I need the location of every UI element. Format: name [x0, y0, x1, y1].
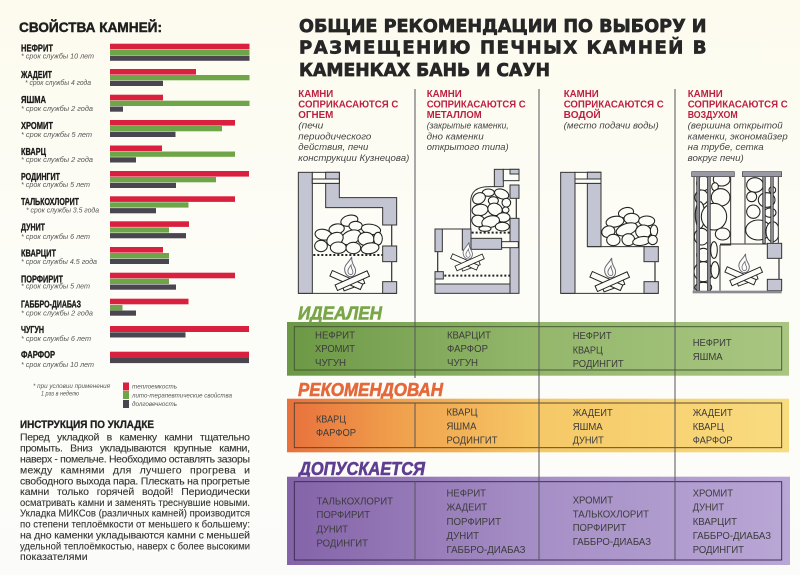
band: ideal: ЧУГУН	[447, 358, 478, 369]
band: ideal: ХРОМИТ	[315, 344, 355, 355]
band: recommended: РОДИНГИТ	[446, 435, 498, 446]
band: allowed: КВАРЦИТ	[693, 517, 737, 528]
band: recommended: КВАРЦ	[316, 415, 347, 426]
row: dunite: * срок службы 6 лет	[21, 232, 90, 241]
instructions text: свободного выхода пара. Плескать на прогретые	[20, 475, 250, 487]
column header: water: ВОДОЙ	[564, 108, 601, 121]
row: talc chlorite: * срок службы 3.5 года	[26, 206, 99, 214]
legend	[123, 382, 232, 408]
column header: fire: КАМНИ	[298, 89, 333, 100]
footnote	[33, 383, 110, 398]
row: quartz	[21, 146, 235, 164]
band: ideal: НЕФРИТ	[573, 331, 612, 342]
row: nephrite: НЕФРИТ	[21, 44, 53, 55]
row: quartz: * срок службы 2 года	[21, 155, 93, 164]
row: porcelain: ФАРФОР	[21, 350, 55, 361]
row: nephrite: * срок службы 10 лет	[21, 52, 94, 60]
instructions text: по степени теплоёмкости от меньшего к большему:	[20, 518, 250, 530]
band: ideal: ИДЕАЛЕН	[298, 303, 383, 323]
row: chromite	[21, 120, 235, 139]
band: recommended: ЖАДЕИТ	[693, 408, 733, 419]
column header: water: (место подачи воды)	[564, 120, 659, 132]
footnote: 1 раз в неделю	[41, 390, 79, 398]
column header: metal: СОПРИКАСАЮТСЯ С	[427, 100, 526, 110]
column header: metal: (закрытые каменки,	[427, 120, 509, 132]
band: ideal: ЧУГУН	[315, 358, 346, 369]
column header: air: каменки, экономайзер	[688, 132, 788, 142]
row: rodingite: РОДИНГИТ	[21, 172, 60, 183]
legend: теплоемкость	[132, 384, 178, 390]
band: recommended: ФАРФОР	[693, 436, 733, 446]
band: allowed	[287, 459, 790, 565]
band: ideal: ФАРФОР	[447, 344, 488, 355]
instructions text: наверх - помельче. Необходимо оставлять зазоры	[20, 454, 250, 466]
band: recommended: ЯШМА	[446, 422, 477, 433]
band: ideal: КВАРЦ	[573, 346, 603, 356]
legend: лито-терапевтические свойства	[131, 392, 232, 400]
row: quartzite	[21, 247, 169, 266]
heading: laying instructions: ИНСТРУКЦИЯ ПО УКЛАДКЕ	[20, 419, 154, 431]
diagram: stove with stones in contact with water	[561, 172, 658, 293]
instructions text: Перед укладкой в каменку камни тщательно	[20, 432, 250, 444]
row: porphyrite: * срок службы 5 лет	[21, 282, 90, 290]
row: dunite	[21, 221, 189, 241]
band: allowed: ГАББРО-ДИАБАЗ	[446, 545, 526, 556]
instructions text: на дно каменки укладываются камни с меньшей	[20, 529, 250, 541]
row: jadeite	[20, 69, 250, 87]
instructions text	[20, 432, 250, 563]
band: allowed: ГАББРО-ДИАБАЗ	[693, 531, 771, 542]
band: allowed: ПОРФИРИТ	[316, 510, 370, 521]
band: ideal: РОДИНГИТ	[573, 359, 624, 370]
band: ideal	[287, 303, 789, 376]
column header: metal	[427, 89, 526, 153]
band: allowed: ДУНИТ	[693, 503, 724, 514]
band: allowed: РОДИНГИТ	[693, 545, 744, 556]
row: rodingite	[21, 171, 249, 189]
row: porphyrite: ПОРФИРИТ	[21, 275, 63, 286]
row: cast iron: ЧУГУН	[21, 325, 44, 336]
instructions text: Укладка МИКСов (различных камней) производится	[20, 508, 250, 520]
diagram: stove with stones in contact with metal	[435, 169, 519, 293]
band: allowed: ПОРФИРИТ	[573, 523, 626, 534]
row: cast iron: * срок службы 6 лет	[21, 334, 91, 343]
band: allowed: РОДИНГИТ	[316, 539, 368, 550]
row: chromite: * срок службы 5 лет	[21, 130, 92, 139]
instructions text: осматривать камни и заменять треснувшие новыми.	[20, 497, 250, 509]
band: recommended: ЯШМА	[573, 422, 603, 433]
column header: fire: конструкции Кузнецова)	[298, 153, 409, 164]
footnote: * при условии применения	[33, 383, 110, 390]
instructions text: промыть. Вниз укладываются крупные камни,	[20, 442, 250, 454]
main title: РАЗМЕЩЕНИЮ ПЕЧНЫХ КАМНЕЙ В	[299, 36, 706, 58]
legend: долговечность	[132, 400, 178, 408]
band: recommended: ЖАДЕИТ	[573, 408, 613, 419]
band: allowed: ПОРФИРИТ	[446, 517, 501, 528]
column header: metal: КАМНИ	[427, 89, 462, 100]
band: allowed: ДОПУСКАЕТСЯ	[297, 459, 426, 479]
instructions text: между камнями для лучшего прогрева и	[20, 464, 250, 476]
row: chromite: ХРОМИТ	[21, 121, 53, 132]
band: ideal: НЕФРИТ	[693, 338, 732, 349]
row: dunite: ДУНИТ	[21, 223, 45, 234]
diagram: stove with stones in contact with fire	[298, 172, 397, 293]
column header: air	[688, 89, 788, 164]
column header: metal: дно каменки	[427, 132, 484, 142]
row: porphyrite	[21, 273, 235, 290]
band: ideal: НЕФРИТ	[315, 330, 355, 341]
row: talc chlorite: ТАЛЬКОХЛОРИТ	[21, 197, 79, 208]
row: jadeite: * срок службы 4 года	[25, 78, 91, 87]
band: allowed: ХРОМИТ	[693, 489, 733, 500]
row: quartzite: * срок службы 4.5 года	[21, 257, 97, 266]
band: allowed: ДУНИТ	[446, 531, 479, 542]
main title	[299, 16, 706, 81]
row: gabbro-diabase	[21, 299, 188, 318]
column header: fire: действия, печи	[298, 142, 369, 153]
column header: water: КАМНИ	[564, 89, 599, 100]
row: talc chlorite	[21, 196, 235, 214]
column header: fire: ОГНЕМ	[298, 110, 333, 121]
column header: air: СОПРИКАСАЮТСЯ С	[688, 100, 788, 110]
column header: metal: открытого типа)	[427, 142, 509, 153]
band: ideal: КВАРЦИТ	[447, 330, 491, 341]
column header: air: ВОЗДУХОМ	[688, 110, 738, 121]
band: allowed: ЖАДЕИТ	[446, 503, 487, 514]
band: recommended: КВАРЦ	[446, 408, 478, 419]
row: porcelain	[21, 350, 249, 369]
column header: fire	[298, 89, 409, 164]
band: recommended: КВАРЦ	[693, 422, 724, 433]
band: allowed: ТАЛЬКОХЛОРИТ	[573, 509, 649, 520]
band: ideal: ЯШМА	[693, 352, 723, 363]
band: recommended: ФАРФОР	[316, 428, 356, 439]
column header: metal: МЕТАЛЛОМ	[427, 110, 482, 121]
band: recommended: ДУНИТ	[573, 436, 604, 446]
column header: water: СОПРИКАСАЮТСЯ С	[564, 100, 664, 110]
heading: stone properties: СВОЙСТВА КАМНЕЙ:	[19, 18, 162, 35]
row: jadeite: ЖАДЕИТ	[20, 70, 52, 81]
band: allowed: НЕФРИТ	[446, 489, 486, 500]
column header: air: КАМНИ	[688, 89, 723, 100]
row: rodingite: * срок службы 5 лет	[21, 180, 90, 189]
main title: КАМЕНКАХ БАНЬ И САУН	[299, 60, 550, 81]
row: porcelain: * срок службы 10 лет	[21, 360, 94, 369]
band: recommended	[287, 380, 789, 452]
column header: water	[564, 89, 664, 132]
band: allowed: ХРОМИТ	[573, 495, 613, 506]
column header: air: вокруг печи)	[688, 153, 744, 164]
column header: fire: СОПРИКАСАЮТСЯ С	[298, 100, 398, 110]
row: cast iron	[21, 325, 249, 343]
row: gabbro-diabase: ГАББРО-ДИАБАЗ	[21, 300, 81, 311]
column header: fire: периодического	[298, 132, 371, 142]
row: jasper: ЯШМА	[21, 95, 46, 106]
instructions text: камни только горячей водой! Периодически	[20, 486, 250, 498]
main title: ОБЩИЕ РЕКОМЕНДАЦИИ ПО ВЫБОРУ И	[299, 16, 706, 37]
panel: laying instructions	[20, 419, 250, 563]
row: gabbro-diabase: * срок службы 2 года	[21, 308, 93, 318]
band: allowed: ДУНИТ	[316, 524, 348, 535]
row: nephrite	[21, 44, 250, 61]
row: quartzite: КВАРЦИТ	[21, 249, 56, 260]
diagram: stove with stones in contact with air	[692, 172, 782, 293]
column header: air: (вершина открытой	[688, 120, 783, 132]
panel: stone properties	[19, 18, 250, 408]
column header: fire: (печи	[298, 120, 324, 132]
band: allowed: ТАЛЬКОХЛОРИТ	[316, 496, 393, 507]
row: jasper: * срок службы 2 года	[21, 104, 93, 113]
row: jasper	[21, 95, 250, 113]
band: allowed: ГАББРО-ДИАБАЗ	[573, 537, 651, 548]
instructions text: показателями	[20, 551, 88, 563]
band: recommended: РЕКОМЕНДОВАН	[298, 380, 444, 400]
column header: air: на трубе, сетка	[688, 142, 764, 153]
instructions text: удельной теплоёмкостью, наверх с более высокими	[20, 540, 250, 552]
row: quartz: КВАРЦ	[21, 147, 47, 158]
